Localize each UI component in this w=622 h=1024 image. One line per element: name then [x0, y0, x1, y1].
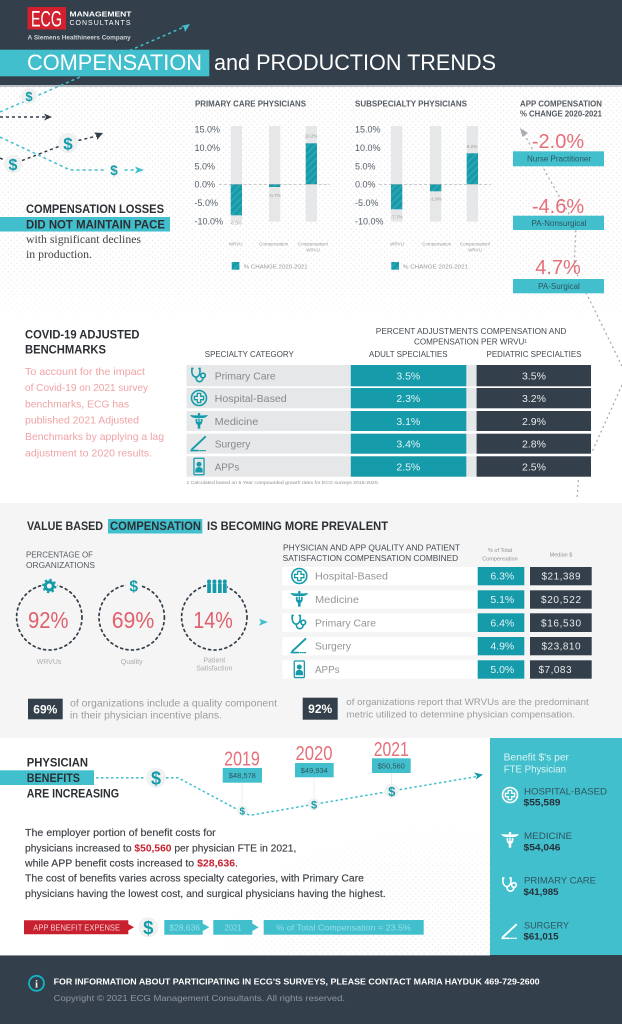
table: quality compensation: Median $ — [550, 553, 572, 559]
callout: 69 percent: of organizations include a quality component — [70, 699, 277, 710]
row: primary care: 6.4% — [490, 617, 514, 629]
table: quality compensation: % of Total — [488, 548, 512, 554]
heading: physician benefits are increasing: ARE INCREASING — [27, 788, 119, 800]
table: covid adjustments — [186, 327, 591, 485]
row: primary care: $16,530 — [541, 618, 581, 629]
row: medicine — [282, 590, 592, 609]
header banner — [0, 0, 622, 87]
logo: ECG Management Consultants — [28, 6, 132, 41]
logo: ECG Management Consultants: MANAGEMENT — [70, 10, 132, 19]
panel: app compensation: -2.0% — [532, 131, 584, 153]
table: covid adjustments: PERCENT ADJUSTMENTS COMPENSATION AND — [376, 327, 567, 336]
title: and PRODUCTION TRENDS — [214, 50, 496, 75]
bar chart: primary care physicians — [194, 100, 330, 270]
bar chart: subspecialty physicians: 0.0% — [355, 180, 376, 190]
row: apps: APPs — [315, 665, 340, 676]
bar chart: subspecialty physicians: SUBSPECIALTY PHYSICIANS — [355, 100, 468, 108]
text block: covid explanation: To account for the impact — [25, 366, 145, 378]
bar chart: primary care physicians: PRIMARY CARE PHYSICIANS — [195, 100, 307, 108]
item: hospital-based: HOSPITAL-BASED — [524, 786, 607, 797]
bar chart: subspecialty physicians: 9.2% — [467, 144, 477, 149]
panel: value based compensation — [0, 503, 622, 738]
row: surgery: $23,810 — [542, 642, 581, 653]
heading: physician benefits are increasing — [0, 758, 119, 800]
arrow: to table — [259, 619, 268, 626]
row: hospital-based: Hospital-Based — [315, 572, 388, 583]
logo: ECG Management Consultants: ECG — [31, 6, 62, 32]
arrow: rising teal line in header — [80, 24, 190, 72]
logo: ECG Management Consultants: CONSULTANTS — [70, 20, 131, 27]
text block: compensation losses: in production. — [26, 249, 92, 261]
bar chart: subspecialty physicians: -7.7% — [391, 214, 403, 220]
text block: covid explanation: adjustment to 2020 results. — [25, 447, 152, 459]
bar chart: primary care physicians: 0.0% — [194, 180, 215, 190]
panel: app compensation: -4.6% — [532, 196, 584, 218]
line chart: physician benefits 2019-2021: $48,578 — [229, 771, 256, 780]
text block: benefits description — [24, 828, 386, 900]
table: covid adjustments: ADULT SPECIALTIES — [369, 350, 448, 359]
footer — [0, 955, 622, 1024]
bar chart: subspecialty physicians: 5.0% — [355, 161, 376, 171]
row: hospital-based: 2.3% — [396, 393, 420, 405]
chart: 92 percent wrvus: 92% — [28, 607, 68, 633]
row: surgery: 4.9% — [490, 641, 514, 653]
text block: benefits description: while APP benefit costs increased to $28,636. — [24, 859, 238, 870]
panel: app compensation: APP COMPENSATION — [520, 100, 602, 108]
row: surgery: Surgery — [315, 642, 351, 653]
text block: compensation losses — [0, 202, 170, 261]
panel: benefit dollars per fte physician: FTE Physician — [504, 764, 566, 775]
heading: value based compensation: COMPENSATION — [110, 521, 201, 533]
bar chart: subspecialty physicians: % CHANGE 2020-2021 — [403, 264, 468, 270]
footer: Copyright © 2021 ECG Management Consultants. All rights reserved. — [54, 993, 345, 1003]
bar chart: subspecialty physicians: Compensation — [422, 242, 452, 246]
chart: 69 percent quality: Quality — [121, 659, 143, 666]
text block: covid explanation: published 2021 Adjusted — [25, 415, 139, 427]
row: medicine — [186, 411, 591, 431]
chart: 92 percent wrvus — [17, 578, 82, 666]
row: hospital-based: $21,389 — [542, 572, 581, 583]
row: apps — [186, 456, 591, 477]
bar chart: subspecialty physicians: WRVU — [390, 242, 404, 246]
row: hospital-based: 6.3% — [490, 571, 514, 583]
flow: app benefit expense: APP BENEFIT EXPENSE — [33, 923, 120, 933]
row: medicine: Medicine — [315, 595, 359, 606]
item: medicine: MEDICINE — [524, 831, 572, 842]
bar chart: primary care physicians: 15.0% — [194, 125, 220, 135]
arrow: gray dashed path at right — [520, 128, 622, 500]
heading: covid-19 adjusted benchmarks — [25, 330, 140, 356]
flow: app benefit expense — [24, 917, 424, 938]
row: apps: 5.0% — [490, 664, 514, 676]
row: primary care: Primary Care — [215, 370, 276, 382]
text block: compensation losses: with significant declines — [26, 234, 142, 246]
text: percentage of organizations — [26, 551, 95, 570]
arrows: decorative money trends at upper left: $ — [110, 163, 118, 178]
item: surgery: $61,015 — [524, 932, 559, 943]
chart: 14 percent patient satisfaction: 14% — [193, 607, 233, 633]
bar chart: primary care physicians: % CHANGE 2020-2021 — [244, 264, 308, 270]
heading: value based compensation: VALUE BASED — [27, 521, 103, 533]
row: medicine: 2.9% — [522, 416, 546, 428]
item: medicine — [501, 831, 572, 853]
callout: 92 percent: metric utilized to determine physician compensation. — [346, 709, 575, 720]
row: apps: APPs — [215, 462, 239, 474]
text block: covid explanation — [25, 366, 164, 459]
row: surgery: 3.4% — [396, 439, 420, 451]
bar chart: primary care physicians: 10.0% — [194, 143, 220, 153]
panel: app compensation: % CHANGE 2020-2021 — [520, 110, 603, 119]
table: quality compensation: PHYSICIAN AND APP QUALITY AND PATIENT — [283, 544, 460, 553]
bar chart: primary care physicians: -10.0% — [194, 216, 223, 226]
arrows: decorative money trends at upper left: $ — [25, 89, 33, 104]
footer: FOR INFORMATION ABOUT PARTICIPATING IN ECG'S SURVEYS, PLEASE CONTACT MARIA HAYDUK 469-729-2600 — [54, 976, 540, 986]
text: percentage of organizations: PERCENTAGE OF — [26, 551, 93, 560]
bar chart: subspecialty physicians — [355, 100, 491, 270]
bar chart: subspecialty physicians: -1.9% — [430, 196, 442, 202]
row: surgery: 2.8% — [522, 439, 546, 451]
text: percentage of organizations: ORGANIZATIONS — [26, 561, 95, 570]
panel: app compensation: PA-Nonsurgical — [532, 219, 587, 228]
chart: 69 percent quality: 69% — [112, 607, 154, 633]
line chart: physician benefits 2019-2021: 2021 — [374, 739, 409, 761]
row: primary care: 3.5% — [522, 370, 546, 382]
item: medicine: $54,046 — [524, 842, 560, 853]
callout: 92 percent: of organizations report that WRVUs are the predominant — [346, 697, 589, 708]
bar chart: subspecialty physicians: 10.0% — [355, 143, 381, 153]
icon: info: i — [35, 978, 38, 990]
bar chart: primary care physicians: WRVU — [229, 242, 243, 246]
arrows: decorative money trends at upper left: $ — [9, 157, 18, 174]
callout: 69 percent — [28, 699, 277, 722]
row: hospital-based: 3.2% — [522, 393, 546, 405]
panel: app compensation: 4.7% — [535, 257, 581, 279]
table: covid adjustments: SPECIALTY CATEGORY — [205, 350, 295, 359]
item: primary care: PRIMARY CARE — [524, 876, 596, 887]
text block: benefits description: physicians increased to $50,560 per physician FTE in 2021, — [25, 843, 296, 854]
chart: 14 percent patient satisfaction: Patient — [203, 658, 225, 665]
line chart: physician benefits 2019-2021: $ — [311, 800, 317, 812]
item: hospital-based — [502, 786, 607, 809]
bar chart: primary care physicians: Compensation — [259, 242, 289, 246]
heading: physician benefits are increasing: BENEFITS — [27, 773, 80, 785]
heading: covid-19 adjusted benchmarks: COVID-19 ADJUSTED — [25, 330, 140, 342]
callout: 69 percent: 69% — [33, 702, 58, 716]
row: primary care — [282, 613, 592, 632]
table: covid adjustments: COMPENSATION PER WRVU¹ — [414, 337, 527, 346]
item: primary care — [503, 876, 596, 898]
heading: value based compensation — [27, 519, 388, 534]
text block: compensation losses: DID NOT MAINTAIN PACE — [26, 218, 165, 232]
callout: 92 percent: 92% — [308, 702, 333, 716]
text block: benefits description: physicians having the lowest cost, and surgical physicians having the highest. — [25, 889, 386, 900]
bar chart: subspecialty physicians: 15.0% — [355, 125, 381, 135]
row: apps: 2.5% — [522, 462, 546, 474]
bar chart: primary care physicians: 10.2% — [305, 134, 317, 138]
panel: app compensation: PA-Surgical — [538, 282, 580, 291]
title — [0, 50, 496, 76]
chart: 69 percent quality: $ — [129, 578, 138, 596]
title: COMPENSATION — [27, 50, 202, 75]
row: hospital-based — [282, 567, 592, 585]
flow: app benefit expense: % of Total Compensation = 23.5% — [276, 923, 411, 933]
row: surgery — [282, 637, 592, 655]
bar chart: subspecialty physicians: -10.0% — [355, 216, 384, 226]
row: surgery: Surgery — [215, 439, 251, 451]
text block: benefits description: The cost of benefits varies across specialty categories, with Primary Care — [25, 874, 364, 885]
table: covid adjustments: PEDIATRIC SPECIALTIES — [486, 350, 582, 359]
item: surgery: SURGERY — [524, 920, 570, 931]
row: medicine: $20,522 — [541, 595, 581, 606]
chart: 69 percent quality — [99, 578, 164, 666]
callout: 92 percent — [303, 697, 589, 720]
row: apps — [282, 660, 592, 679]
table: covid adjustments: 1 Calculated based on 5 Year compounded growth rates for ECG surveys 2015-2020. — [186, 480, 379, 485]
bar chart: primary care physicians: -8.5% — [230, 220, 242, 226]
flow: app benefit expense: $28,636 — [170, 923, 200, 933]
row: apps: 2.5% — [396, 462, 420, 474]
text block: covid explanation: Benchmarks by applying a lag — [25, 431, 164, 443]
flow: app benefit expense: 2021 — [224, 923, 242, 933]
row: primary care: Primary Care — [315, 618, 376, 629]
panel: benefit dollars per fte physician — [490, 738, 622, 956]
chart: 92 percent wrvus: WRVUs — [37, 659, 62, 666]
text block: compensation losses: COMPENSATION LOSSES — [26, 202, 164, 216]
item: hospital-based: $55,589 — [524, 798, 560, 809]
bar chart: subspecialty physicians: WRVU — [468, 248, 482, 252]
chart: 14 percent patient satisfaction: Satisfaction — [196, 666, 232, 673]
text block: benefits description: The employer portion of benefit costs for — [25, 828, 216, 839]
bar chart: primary care physicians: Compensation/ — [298, 242, 329, 246]
heading: covid-19 adjusted benchmarks: BENCHMARKS — [25, 344, 106, 356]
table: quality compensation — [282, 544, 592, 679]
text block: covid explanation: of Covid-19 on 2021 survey — [25, 382, 149, 394]
row: apps: $7,083 — [538, 665, 572, 676]
bar chart: primary care physicians: WRVU — [306, 248, 320, 252]
panel: benefit dollars per fte physician: Benefit $'s per — [504, 752, 570, 763]
arrows: decorative money trends at upper left: $ — [63, 134, 73, 154]
table: quality compensation: Compensation — [482, 557, 518, 563]
line chart: physician benefits 2019-2021: 2020 — [296, 743, 332, 765]
panel: app compensation: Nurse Practitioner — [527, 155, 591, 164]
row: medicine: 3.1% — [396, 416, 420, 428]
item: surgery — [502, 920, 570, 943]
bar chart: subspecialty physicians: -5.0% — [355, 198, 379, 208]
heading: physician benefits are increasing: PHYSICIAN — [27, 758, 88, 770]
text block: covid explanation: benchmarks, ECG has — [25, 398, 129, 410]
table: quality compensation: SATISFACTION COMPENSATION COMBINED — [283, 554, 458, 563]
line chart: physician benefits 2019-2021 — [96, 739, 483, 818]
line chart: physician benefits 2019-2021: $49,934 — [301, 766, 328, 775]
logo: ECG Management Consultants: A Siemens Healthineers Company — [28, 34, 131, 41]
item: primary care: $41,985 — [524, 887, 559, 898]
line chart: physician benefits 2019-2021: $ — [388, 784, 396, 799]
line chart: physician benefits 2019-2021: 2019 — [224, 749, 260, 771]
heading: value based compensation: IS BECOMING MORE PREVALENT — [207, 521, 388, 533]
icon: info — [29, 976, 44, 991]
row: primary care: 3.5% — [396, 370, 420, 382]
line chart: physician benefits 2019-2021: $ — [240, 806, 246, 818]
chart: 14 percent patient satisfaction — [182, 578, 247, 673]
flow: app benefit expense: $ — [143, 917, 154, 938]
row: medicine: Medicine — [215, 416, 258, 428]
row: primary care — [186, 365, 591, 386]
bar chart: primary care physicians: 5.0% — [194, 161, 215, 171]
arrows: decorative money trends at upper left — [0, 77, 144, 178]
bar chart: subspecialty physicians: Compensation/ — [460, 242, 491, 246]
row: medicine: 5.1% — [490, 594, 514, 606]
panel: app compensation — [513, 100, 604, 293]
row: hospital-based: Hospital-Based — [215, 393, 287, 405]
callout: 69 percent: in their physician incentive plans. — [70, 711, 222, 722]
line chart: physician benefits 2019-2021: $ — [151, 768, 161, 788]
row: surgery — [186, 434, 591, 454]
line chart: physician benefits 2019-2021: $50,560 — [378, 762, 405, 770]
row: hospital-based — [186, 388, 591, 408]
bar chart: primary care physicians: -0.7% — [269, 193, 281, 198]
bar chart: primary care physicians: -5.0% — [194, 198, 218, 208]
